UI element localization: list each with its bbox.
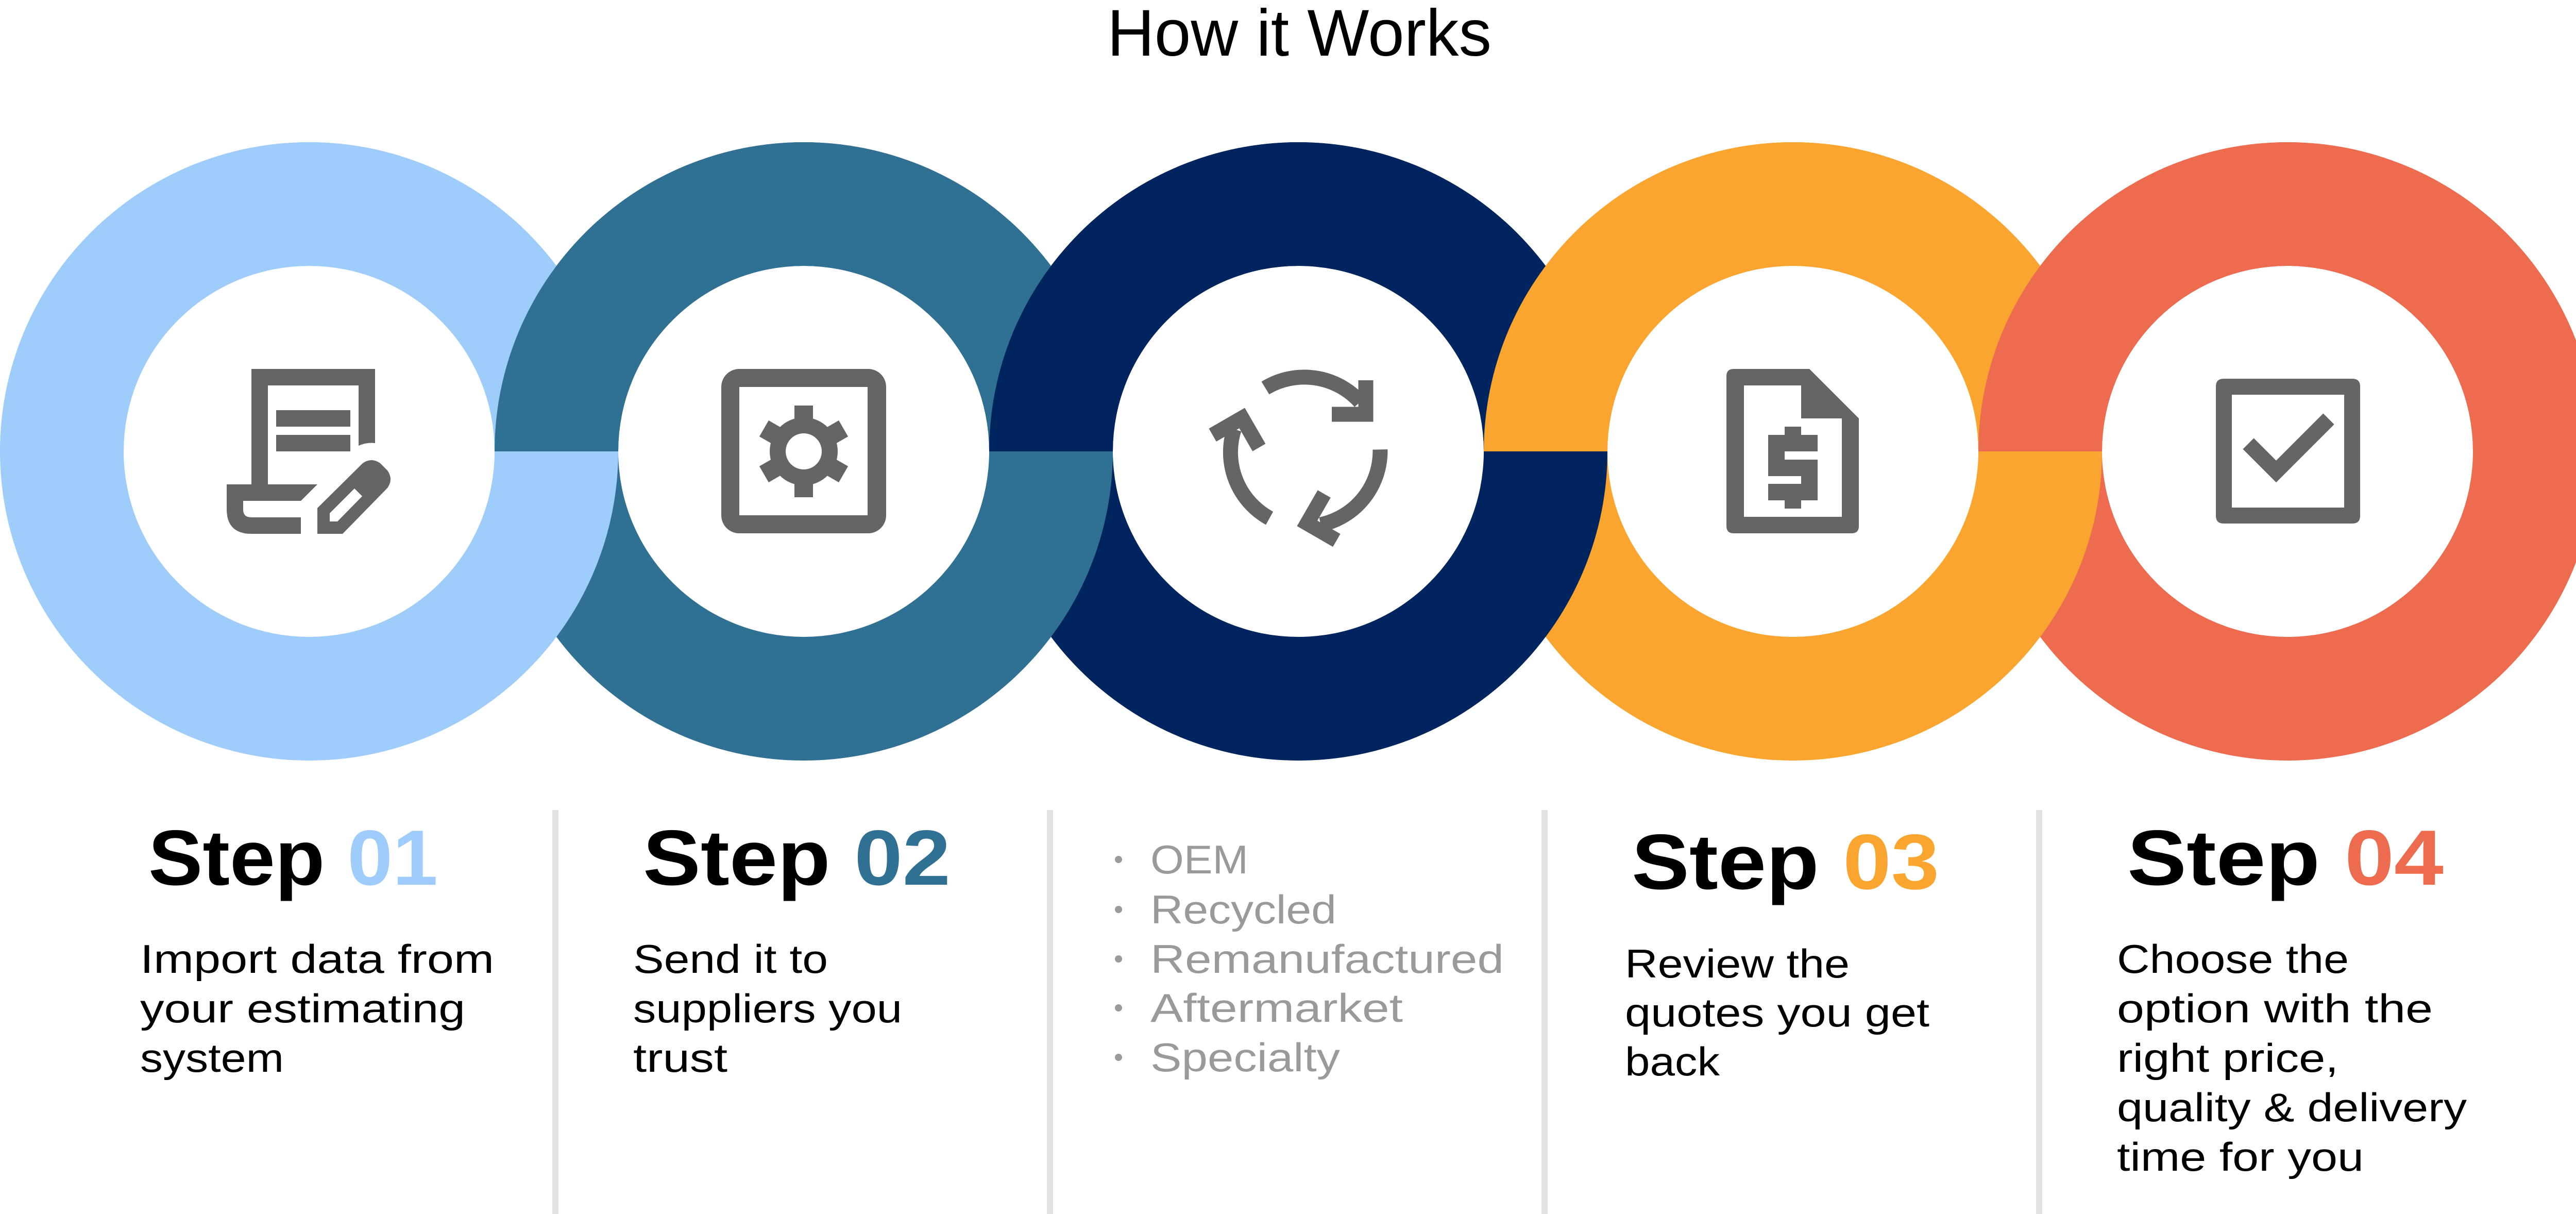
text: step 04 description: right price, bbox=[2117, 1035, 2338, 1081]
text: step 02 description: Send it to bbox=[633, 936, 828, 982]
step 01 bbox=[140, 814, 494, 1081]
heading: step 01: Step 01 bbox=[148, 814, 438, 902]
text: step 03 description: back bbox=[1625, 1039, 1720, 1084]
text: step 01 description: Import data from bbox=[140, 936, 494, 982]
step 04 bbox=[2117, 814, 2467, 1179]
text: step 04 description: option with the bbox=[2117, 986, 2433, 1031]
heading: step 02: Step 02 bbox=[643, 814, 951, 902]
list: part types bbox=[1115, 837, 1504, 1080]
interlocking rings bbox=[0, 142, 2576, 761]
step 03 bbox=[1625, 818, 1939, 1084]
text: step 04 description: Choose the bbox=[2117, 936, 2349, 982]
text: step 02 description bbox=[633, 936, 902, 1081]
text: step 01 description: system bbox=[140, 1035, 284, 1081]
text: step 04 description bbox=[2117, 936, 2467, 1179]
icon: checkbox bbox=[2216, 379, 2360, 524]
list: part types: Specialty bbox=[1150, 1035, 1340, 1080]
heading: step 04: Step 04 bbox=[2127, 814, 2444, 902]
text: step 01 description bbox=[140, 936, 494, 1081]
text: step 03 description bbox=[1625, 941, 1929, 1084]
text: step 01 description: your estimating bbox=[140, 986, 465, 1031]
text: step 03 description: quotes you get bbox=[1625, 990, 1929, 1035]
dividers bbox=[552, 810, 2042, 1214]
icon: gear in square bbox=[721, 369, 886, 533]
icon: refresh arrows bbox=[1210, 377, 1389, 542]
list: part types: Remanufactured bbox=[1150, 936, 1504, 982]
text: step 04 description: time for you bbox=[2117, 1134, 2364, 1179]
step 02 bbox=[633, 814, 951, 1081]
list: part types: OEM bbox=[1150, 837, 1248, 882]
text: step 02 description: suppliers you bbox=[633, 986, 902, 1031]
icon: scroll with pencil bbox=[227, 369, 391, 534]
list: part types: Aftermarket bbox=[1150, 985, 1403, 1031]
heading: step 03: Step 03 bbox=[1632, 818, 1939, 906]
icon: document with dollar bbox=[1726, 369, 1859, 533]
text: step 02 description: trust bbox=[633, 1035, 727, 1081]
list: part types: Recycled bbox=[1150, 887, 1336, 932]
text: step 04 description: quality & delivery bbox=[2117, 1085, 2467, 1130]
text: step 03 description: Review the bbox=[1625, 941, 1850, 986]
